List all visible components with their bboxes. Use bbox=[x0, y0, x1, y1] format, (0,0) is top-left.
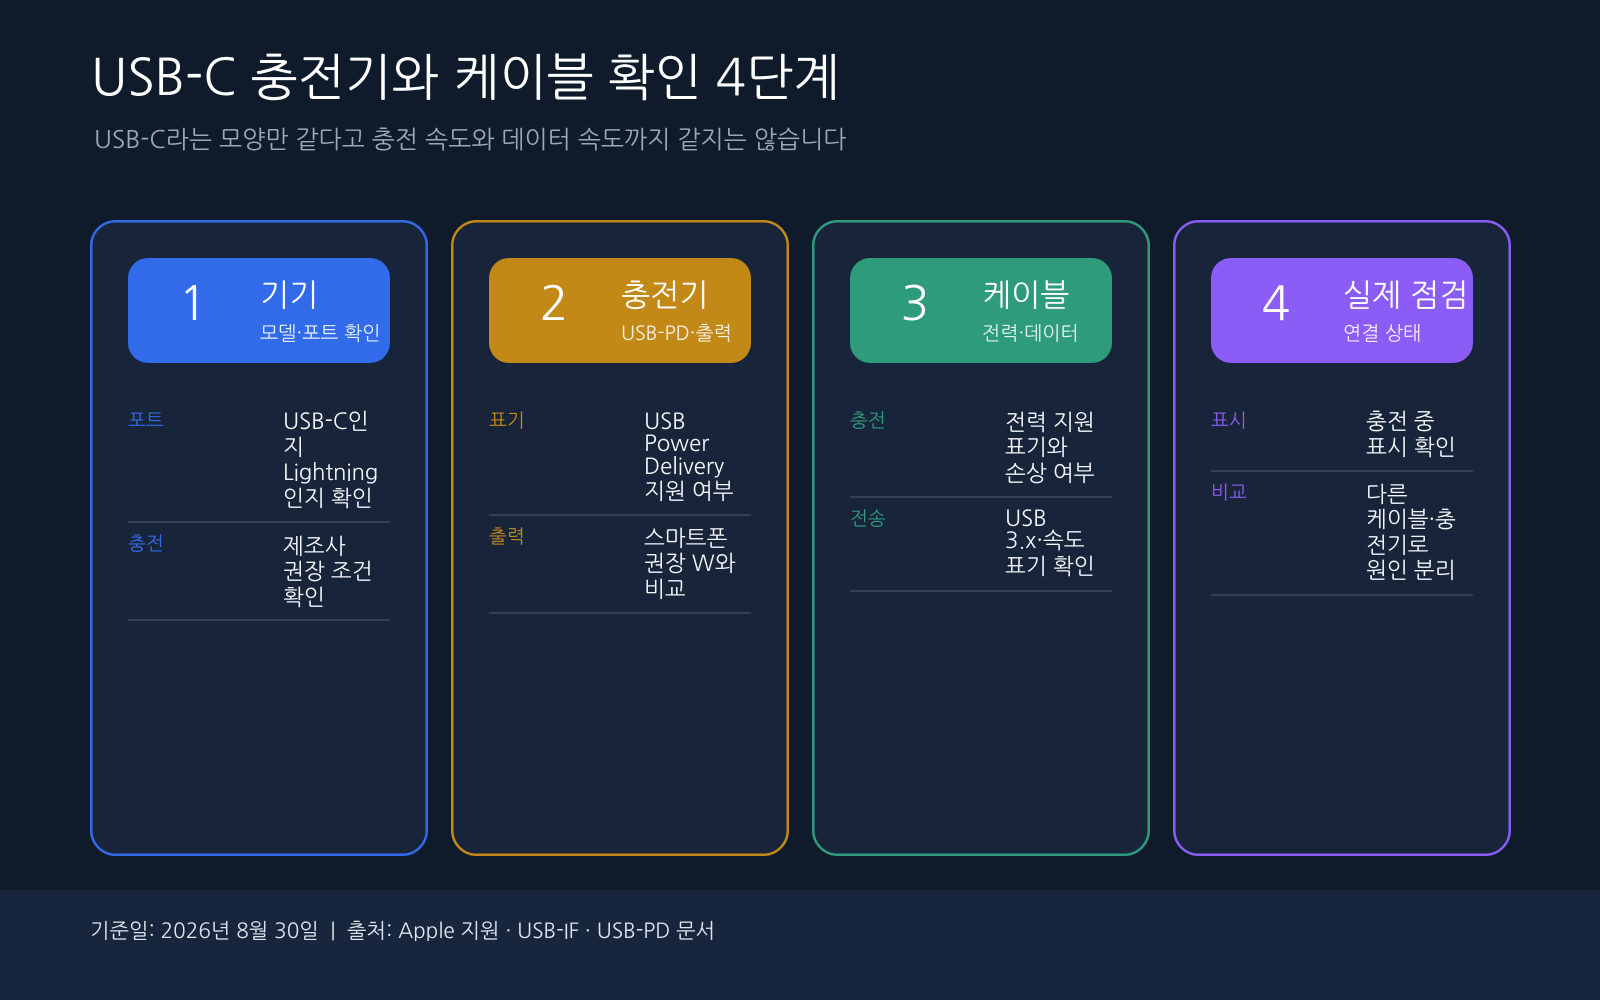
step 2 subtitle: USB-PD·출력 bbox=[621, 323, 732, 343]
footer bar bbox=[0, 890, 1600, 1000]
value: compare: 케이블·충 bbox=[1366, 509, 1456, 531]
panel: step 4 real check bbox=[1173, 220, 1511, 856]
label: indicator: 표시 bbox=[1211, 411, 1247, 430]
step 1 title: 기기 bbox=[260, 280, 318, 311]
value: charging: 전력 지원 bbox=[1005, 412, 1095, 434]
value: marking: Power bbox=[644, 433, 709, 455]
source note: 기준일: 2026년 8월 30일 | 출처: Apple 지원 · USB-IF · USB-PD 문서 bbox=[90, 920, 715, 941]
panel: step 2 charger bbox=[451, 220, 789, 856]
label: charging: 충전 bbox=[850, 411, 886, 430]
value: port: USB-C인 bbox=[283, 411, 368, 433]
step 3 header bbox=[850, 258, 1112, 363]
value: marking bbox=[644, 411, 734, 503]
step number 1: 1 bbox=[179, 280, 207, 327]
value: transfer bbox=[1005, 508, 1095, 578]
value: compare: 다른 bbox=[1366, 484, 1408, 506]
value: charging: 확인 bbox=[283, 587, 325, 609]
panel: step 3 cable bbox=[812, 220, 1150, 856]
label: compare: 비교 bbox=[1211, 483, 1247, 502]
value: output: 비교 bbox=[644, 579, 686, 601]
step 1 header bbox=[128, 258, 390, 363]
value: port: 인지 확인 bbox=[283, 488, 373, 510]
label: marking: 표기 bbox=[489, 411, 525, 430]
value: port: 지 bbox=[283, 437, 304, 459]
value: transfer: USB bbox=[1005, 508, 1047, 530]
value: indicator bbox=[1366, 410, 1456, 459]
value: marking: USB bbox=[644, 411, 686, 433]
step 1 subtitle: 모델·포트 확인 bbox=[260, 323, 380, 343]
value: compare bbox=[1366, 484, 1456, 582]
value: port: Lightning bbox=[283, 462, 378, 484]
step 4 header bbox=[1211, 258, 1473, 363]
value: marking: 지원 여부 bbox=[644, 481, 734, 503]
step 3 title: 케이블 bbox=[982, 280, 1069, 311]
step number 4: 4 bbox=[1262, 280, 1290, 327]
step 2 header bbox=[489, 258, 751, 363]
label: transfer: 전송 bbox=[850, 509, 886, 528]
step number 2: 2 bbox=[540, 280, 568, 327]
step number 3: 3 bbox=[901, 280, 929, 327]
value: indicator: 충전 중 bbox=[1366, 411, 1435, 433]
step 2 title: 충전기 bbox=[621, 280, 708, 311]
value: transfer: 표기 확인 bbox=[1005, 556, 1095, 578]
title: USB-C 충전기와 케이블 확인 4단계 bbox=[91, 53, 840, 103]
step 4 subtitle: 연결 상태 bbox=[1343, 323, 1421, 343]
value: marking: Delivery bbox=[644, 456, 724, 478]
label: charging: 충전 bbox=[128, 534, 164, 553]
panel: step 1 device bbox=[90, 220, 428, 856]
label: output: 출력 bbox=[489, 527, 525, 546]
value: compare: 원인 분리 bbox=[1366, 560, 1456, 582]
value: output bbox=[644, 528, 736, 601]
value: indicator: 표시 확인 bbox=[1366, 437, 1456, 459]
subtitle: USB-C라는 모양만 같다고 충전 속도와 데이터 속도까지 같지는 않습니다 bbox=[94, 127, 846, 152]
value: output: 권장 W와 bbox=[644, 553, 736, 575]
value: output: 스마트폰 bbox=[644, 528, 727, 550]
value: charging: 손상 여부 bbox=[1005, 463, 1095, 485]
value: charging bbox=[1005, 412, 1095, 485]
step 3 subtitle: 전력·데이터 bbox=[982, 323, 1079, 343]
step 4 title: 실제 점검 bbox=[1343, 280, 1468, 311]
label: port: 포트 bbox=[128, 411, 164, 430]
value: charging: 제조사 bbox=[283, 536, 346, 558]
value: charging bbox=[283, 536, 373, 609]
value: transfer: 3.x·속도 bbox=[1005, 530, 1085, 552]
value: charging: 권장 조건 bbox=[283, 561, 373, 583]
value: port bbox=[283, 410, 378, 510]
value: charging: 표기와 bbox=[1005, 437, 1068, 459]
value: compare: 전기로 bbox=[1366, 535, 1429, 557]
